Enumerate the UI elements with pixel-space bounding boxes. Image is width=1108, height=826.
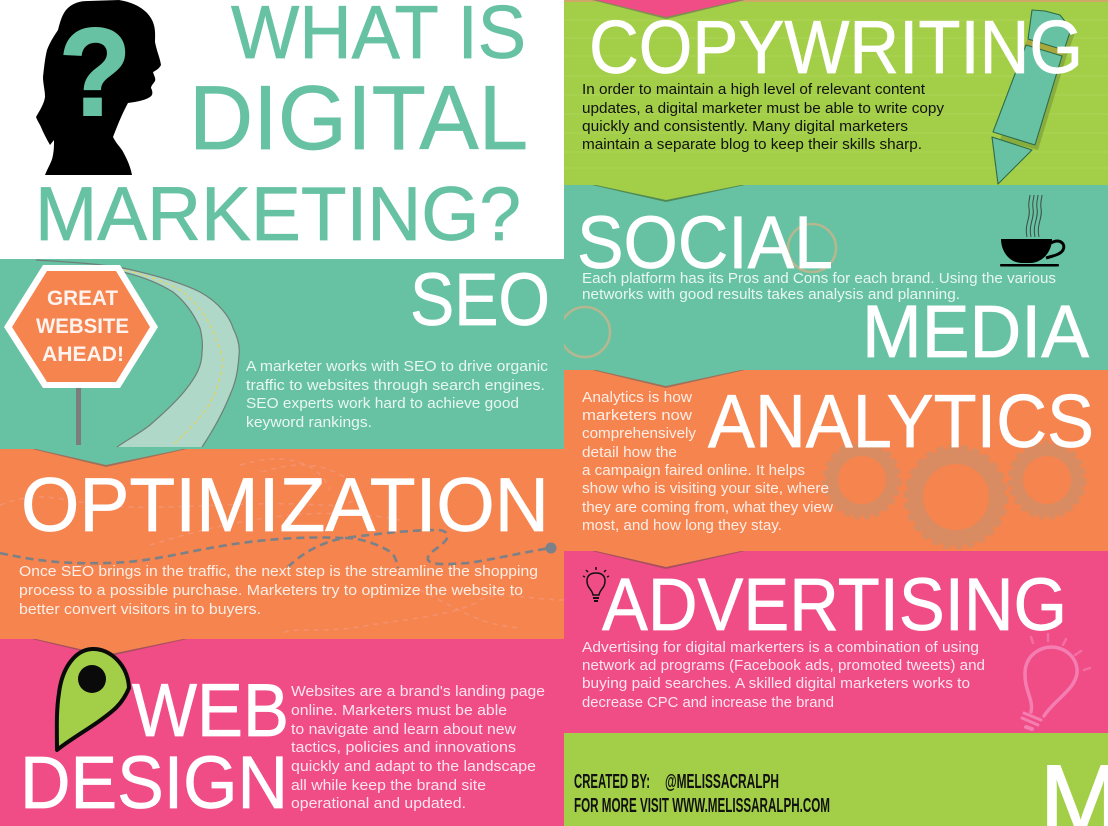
text: Advertising description: buying paid searches. A skilled digital marketers works to bbox=[582, 676, 970, 692]
panel: footer bbox=[564, 733, 1108, 826]
arrow: pink chevron bbox=[592, 0, 745, 19]
faint map route lines bbox=[0, 459, 564, 635]
heading: Web Design: WEB bbox=[132, 668, 289, 752]
text: Advertising description bbox=[582, 640, 985, 711]
text: Copywriting description: quickly and consistently. Many digital marketers bbox=[582, 119, 908, 135]
text: Web Design description: all while keep the brand site bbox=[291, 778, 486, 794]
text: credits: CREATED BY: bbox=[574, 771, 650, 793]
text: SEO description: traffic to websites through search engines. bbox=[246, 378, 545, 394]
panel: Copywriting bbox=[564, 0, 1108, 185]
icon: gears bbox=[825, 443, 1084, 547]
text: Optimization description bbox=[19, 564, 538, 618]
icon: hexagon road sign: AHEAD! bbox=[42, 343, 124, 366]
text: Optimization description: Once SEO brings in the traffic, the next step is the streamline the shopping bbox=[19, 564, 538, 580]
text: Web Design description: quickly and adapt to the landscape bbox=[291, 759, 536, 775]
text: SEO description: SEO experts work hard to achieve good bbox=[246, 396, 519, 412]
text: Social Media description: Each platform has its Pros and Cons for each brand. Using the various bbox=[582, 271, 1056, 287]
text: Web Design description: operational and updated. bbox=[291, 796, 466, 812]
panel: Social Media bbox=[560, 185, 1108, 373]
text: Advertising description: decrease CPC and increase the brand bbox=[582, 695, 834, 711]
panel: SEO bbox=[0, 258, 564, 449]
heading: Optimization: OPTIMIZATION bbox=[21, 463, 549, 548]
icon: small black light bulb bbox=[583, 567, 609, 601]
heading: Analytics: ANALYTICS bbox=[708, 379, 1094, 463]
arrow: orange chevron bbox=[592, 551, 745, 569]
panel: title background bbox=[0, 0, 564, 259]
arrow: teal chevron bbox=[592, 370, 745, 388]
arrow: teal chevron bbox=[32, 449, 187, 467]
title: DIGITAL bbox=[189, 68, 528, 169]
icon: woman silhouette with question mark bbox=[36, 0, 161, 175]
text: Analytics description: marketers now bbox=[582, 408, 693, 424]
icon: coffee cup bbox=[1000, 195, 1064, 266]
text: Web Design description: Websites are a brand's landing page bbox=[291, 684, 545, 700]
text: Web Design description: online. Marketers must be able bbox=[291, 703, 507, 719]
text: Web Design description: tactics, policies and innovations bbox=[291, 740, 516, 756]
text: Social Media description: networks with good results takes analysis and planning. bbox=[582, 287, 960, 303]
title: MARKETING? bbox=[35, 172, 521, 257]
panel: Advertising bbox=[564, 551, 1108, 733]
panel: Optimization bbox=[0, 449, 564, 639]
title bbox=[35, 0, 528, 257]
text: Web Design description bbox=[291, 684, 545, 812]
text: Analytics description: Analytics is how bbox=[582, 390, 692, 406]
text: Copywriting description: In order to maintain a high level of relevant content bbox=[582, 82, 925, 98]
text: credits: FOR MORE VISIT WWW.MELISSARALPH.COM bbox=[574, 795, 830, 817]
text: credits bbox=[574, 771, 830, 817]
text: Copywriting description: updates, a digital marketer must be able to write copy bbox=[582, 101, 945, 117]
text: Advertising description: network ad programs (Facebook ads, promoted tweets) and bbox=[582, 658, 985, 674]
heading: Media: MEDIA bbox=[862, 290, 1090, 373]
text: Optimization description: process to a possible purchase. Marketers try to optimize the website to bbox=[19, 583, 523, 599]
text: Advertising description: Advertising for digital markerters is a combination of using bbox=[582, 640, 979, 656]
icon: road bbox=[36, 260, 239, 447]
text: credits: @MELISSACRALPH bbox=[665, 771, 779, 793]
text: Analytics description: detail how the bbox=[582, 445, 677, 461]
text: Social Media description bbox=[582, 271, 1056, 303]
icon: dashed route with endpoint bbox=[0, 530, 556, 568]
icon: hexagon road sign bbox=[4, 265, 158, 388]
text: Analytics description: a campaign faired online. It helps bbox=[582, 463, 805, 479]
text: Analytics description: they are coming from, what they view bbox=[582, 500, 833, 516]
icon: road sign post bbox=[76, 388, 81, 445]
icon: map pin bbox=[57, 649, 129, 750]
icon: circle outlines bbox=[560, 224, 836, 357]
text: SEO description bbox=[246, 359, 548, 431]
panel: Analytics bbox=[564, 370, 1108, 551]
icon: woman silhouette with question mark: ? bbox=[59, 4, 131, 142]
faint paper lines bbox=[564, 20, 1108, 168]
heading: Web Design: DESIGN bbox=[20, 741, 288, 824]
heading: Web Design bbox=[20, 668, 289, 824]
text: SEO description: keyword rankings. bbox=[246, 415, 372, 431]
icon: large faint light bulb bbox=[1022, 634, 1090, 729]
heading: Advertising: ADVERTISING bbox=[602, 563, 1067, 646]
heading: Social: SOCIAL bbox=[577, 201, 833, 284]
text: Analytics description: show who is visiting your site, where bbox=[582, 481, 829, 497]
heading: SEO: SEO bbox=[410, 258, 550, 341]
text: Optimization description: better convert visitors in to buyers. bbox=[19, 602, 261, 618]
icon: hexagon road sign: GREAT bbox=[47, 287, 118, 310]
text: Copywriting description bbox=[582, 82, 945, 153]
icon: hexagon road sign: WEBSITE bbox=[36, 315, 129, 338]
icon: pencil bbox=[992, 10, 1076, 184]
text: Copywriting description: maintain a separate blog to keep their skills sharp. bbox=[582, 137, 922, 153]
text: SEO description: A marketer works with SEO to drive organic bbox=[246, 359, 548, 375]
panel: Web Design bbox=[0, 639, 564, 826]
text: Analytics description bbox=[582, 390, 833, 534]
text: Analytics description: most, and how long they stay. bbox=[582, 518, 782, 534]
arrow: orange chevron bbox=[32, 639, 187, 657]
text: Web Design description: to navigate and learn about new bbox=[291, 722, 516, 738]
arrow: green chevron bbox=[592, 185, 745, 202]
text: Analytics description: comprehensively bbox=[582, 426, 697, 442]
